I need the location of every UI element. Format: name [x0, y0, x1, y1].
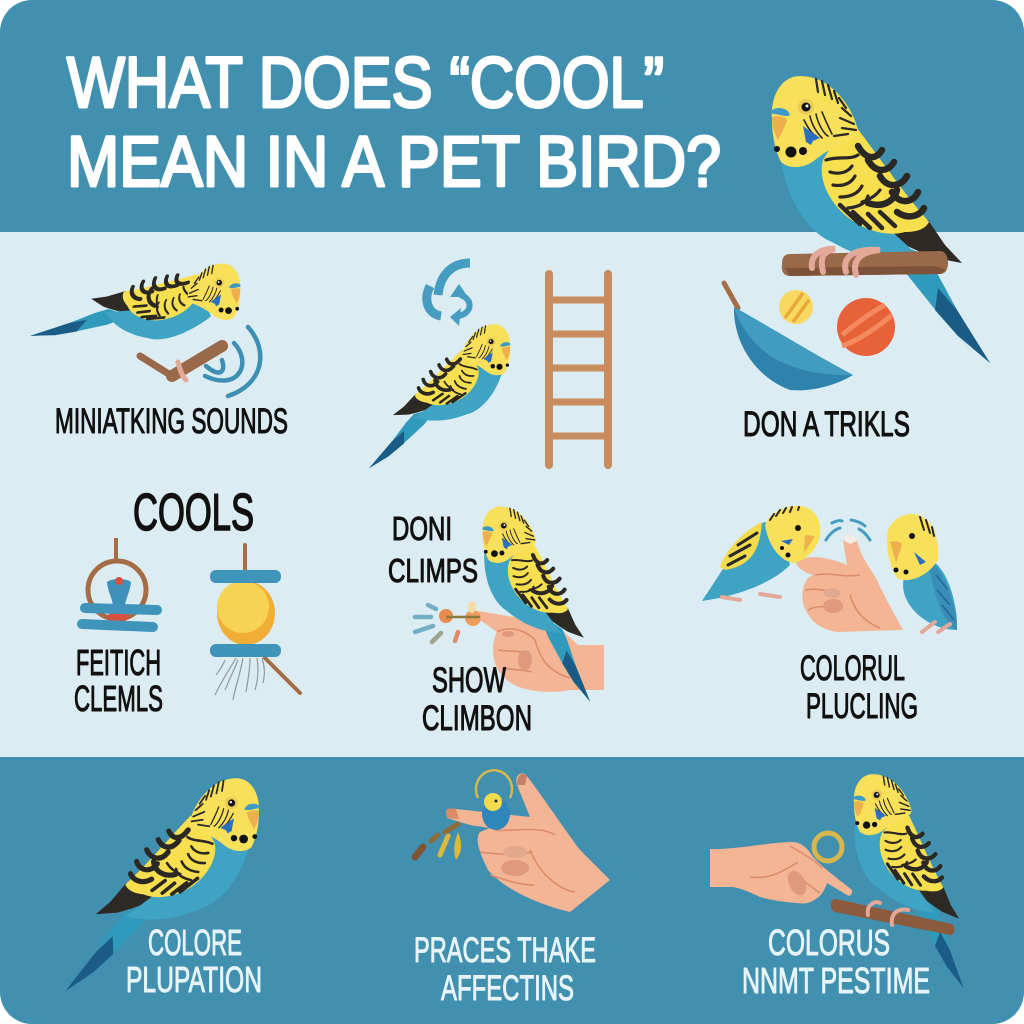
title: MEAN IN A PET BIRD?: [67, 123, 721, 202]
icon: sparks: [415, 824, 461, 860]
perch: [831, 899, 954, 935]
label: COLORUL: [800, 649, 905, 688]
icon: ring bell toy: [82, 538, 157, 627]
heading: COOLS: [133, 484, 254, 542]
label: [126, 922, 262, 1000]
label: CLIMPS: [388, 552, 478, 589]
bird: tiny budgie: [482, 793, 510, 830]
label: DONI: [392, 510, 452, 547]
icon: wooden ladder: [549, 274, 608, 465]
item: doing tricks: [724, 283, 910, 444]
icon: pointing hand: [795, 534, 903, 632]
label: CLIMBON: [422, 699, 532, 738]
bird: left budgie: [702, 506, 820, 601]
item: cool toys: [74, 484, 300, 719]
feet: [868, 902, 908, 925]
icon: gold ring: [814, 833, 842, 861]
icon: hand with small bird: [446, 773, 610, 912]
item: mimicking sounds: [30, 224, 288, 441]
item: climbing ladder: [369, 263, 608, 486]
label: DON A TRIKLS: [743, 405, 910, 444]
icon: hand: [478, 611, 604, 692]
label: SHOW: [432, 661, 506, 700]
label: [74, 642, 163, 719]
label: COLORUS: [768, 922, 890, 963]
icon: flower and sparks: [415, 601, 481, 642]
bird: right budgie: [887, 514, 957, 632]
item: bird on hand: [388, 506, 615, 738]
light middle panel: [0, 232, 1024, 757]
hero budgie on perch: [772, 76, 990, 363]
icon: red ball: [837, 298, 895, 356]
label: [742, 922, 930, 1001]
label: PLUPATION: [126, 959, 262, 1000]
icon: yellow ball: [779, 290, 813, 324]
icon: motion marks: [826, 520, 870, 540]
label: PLUCLING: [806, 687, 918, 726]
icon: gold halo ring: [476, 770, 512, 798]
icon: perch: [172, 346, 222, 376]
label: MINIATKING SOUNDS: [55, 402, 288, 441]
item: colorful plucking: [702, 506, 957, 726]
bird: large budgie: [65, 778, 259, 1009]
label: PRACES THAKE: [414, 931, 596, 970]
label: [800, 649, 918, 726]
title: WHAT DOES “COOL”: [67, 44, 664, 123]
label: COLORE: [148, 922, 242, 963]
label: CLEMLS: [74, 678, 163, 719]
label: NNMT PESTIME: [742, 960, 930, 1001]
bird: standing budgie: [826, 774, 996, 988]
label: [388, 510, 478, 589]
icon: hand offering: [710, 842, 852, 903]
icon: feather fan: [724, 283, 853, 390]
bird: budgie perched on finger: [462, 506, 615, 702]
icon: sound waves: [205, 327, 260, 396]
label: [414, 931, 596, 1008]
label: AFFECTINS: [441, 969, 574, 1008]
title: [67, 44, 721, 202]
bird: budgie diving: [369, 324, 510, 486]
icon: perch twig: [140, 356, 172, 376]
icon: foot: [178, 362, 186, 380]
label: FEITICH: [76, 642, 161, 683]
label: [422, 661, 532, 738]
item: affection hand: [414, 770, 610, 1008]
icon: yellow ball toy: [210, 545, 300, 700]
item: bird with ring: [710, 774, 996, 1001]
item: colourful plumage: [65, 778, 262, 1009]
icon: rotation arrows: [427, 263, 470, 326]
bird: budgie facing right: [30, 224, 240, 416]
